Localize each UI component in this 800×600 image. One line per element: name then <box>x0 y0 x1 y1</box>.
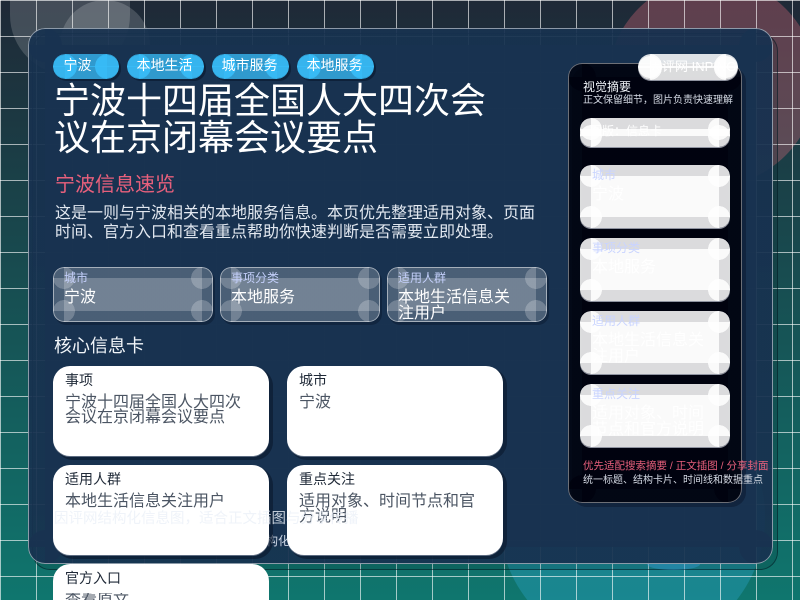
info card: 城市: 城市 <box>299 372 327 388</box>
side card: 重点关注: 适用对象、时间 <box>592 405 704 422</box>
side card: 城市: 城市 <box>592 168 616 182</box>
title: 宁波十四届全国人大四次会 <box>54 80 486 121</box>
footer caption: 因评网结构化信息图，适合正文插图与分享传播 <box>54 511 358 527</box>
footer fragment: 构化 <box>266 534 290 548</box>
info card: 官方入口: 官方入口 <box>65 570 121 586</box>
info card: 事项: 宁波十四届全国人大四次 <box>65 394 241 411</box>
side panel shadow <box>572 67 746 507</box>
chip: 本地生活: 本地生活 <box>136 57 192 73</box>
side panel pink note: 优先适配搜索摘要 / 正文插图 / 分享封面 <box>583 460 769 472</box>
brand pill <box>638 54 738 80</box>
side panel note: 统一标题、结构卡片、时间线和数据重点 <box>583 475 763 486</box>
title: 议在京闭幕会议要点 <box>54 117 378 158</box>
stat card: 城市 <box>53 267 213 322</box>
side card: 重点关注: 重点关注 <box>592 387 640 401</box>
chip: 城市服务: 城市服务 <box>222 57 278 73</box>
side panel <box>568 63 742 503</box>
side card: 适用人群 <box>580 311 730 374</box>
side card: 适用人群: 适用人群 <box>592 314 640 328</box>
info card: 适用人群 <box>53 465 269 555</box>
side panel heading: 视觉摘要 <box>583 80 631 94</box>
side card: 版式: 图版：信息卡 <box>590 124 662 138</box>
side card: 事项分类 <box>580 238 730 301</box>
chip: 本地服务 <box>297 54 374 79</box>
stat card: 适用人群: 适用人群 <box>398 271 446 285</box>
info card: 适用人群: 本地生活信息关注用户 <box>65 493 225 510</box>
side card: 城市 <box>580 165 730 228</box>
info card: 重点关注: 适用对象、时间节点和官 <box>299 493 475 510</box>
stat card: 事项分类 <box>220 267 380 322</box>
title <box>54 80 486 158</box>
info card: 事项: 会议在京闭幕会议要点 <box>65 409 225 426</box>
info card: 重点关注 <box>287 465 503 555</box>
chip: 城市服务 <box>212 54 289 79</box>
info card: 适用人群: 适用人群 <box>65 471 121 487</box>
background decorative circle: white large <box>10 0 130 75</box>
background decorative circle: teal <box>508 564 756 600</box>
side card: 城市: 宁波 <box>592 186 624 203</box>
chip: 宁波: 宁波 <box>64 57 92 73</box>
side card: 版式 <box>580 118 730 147</box>
background decorative circle: white small <box>60 0 150 90</box>
side card: 适用人群: 注用户 <box>592 348 640 364</box>
stat card: 事项分类: 本地服务 <box>231 289 295 306</box>
side card: 适用人群: 本地生活信息关 <box>592 332 704 349</box>
info card: 官方入口 <box>53 564 269 600</box>
tag chips <box>53 54 376 81</box>
subtitle: 宁波信息速览 <box>55 174 175 196</box>
info card: 城市: 宁波 <box>299 394 331 411</box>
background decorative circle: pink <box>623 0 800 166</box>
side panel subheading: 正文保留细节，图片负责快速理解 <box>583 95 733 106</box>
shadow highlight lens <box>647 564 700 570</box>
chip: 本地生活 <box>127 54 204 79</box>
side card: 重点关注 <box>580 384 730 447</box>
stat card: 事项分类: 事项分类 <box>231 271 279 285</box>
chip: 宁波 <box>53 54 119 79</box>
info card: 事项 <box>53 366 269 456</box>
section heading: 核心信息卡 <box>54 336 144 356</box>
side card: 重点关注: 节点和官方说明 <box>592 420 704 438</box>
intro paragraph <box>55 204 535 241</box>
side card: 事项分类: 本地服务 <box>592 259 656 276</box>
stat card: 适用人群: 本地生活信息关 <box>398 289 510 306</box>
stat card: 城市: 城市 <box>64 271 88 285</box>
brand pill: 因评网 INPING <box>649 59 736 74</box>
intro paragraph: 这是一则与宁波相关的本地服务信息。本页优先整理适用对象、页面 <box>55 205 535 222</box>
stat card: 适用人群: 注用户 <box>398 304 446 322</box>
chip: 本地服务: 本地服务 <box>306 57 362 73</box>
stat card: 城市: 宁波 <box>64 289 96 306</box>
stat card: 适用人群 <box>387 267 547 322</box>
side card: 事项分类: 事项分类 <box>592 241 640 255</box>
intro paragraph: 时间、官方入口和查看重点帮助你快速判断是否需要立即处理。 <box>55 224 503 241</box>
info card: 城市 <box>287 366 503 456</box>
info card: 事项: 事项 <box>65 372 93 388</box>
info card: 重点关注: 方说明 <box>299 508 347 525</box>
info card: 重点关注: 重点关注 <box>299 471 355 487</box>
